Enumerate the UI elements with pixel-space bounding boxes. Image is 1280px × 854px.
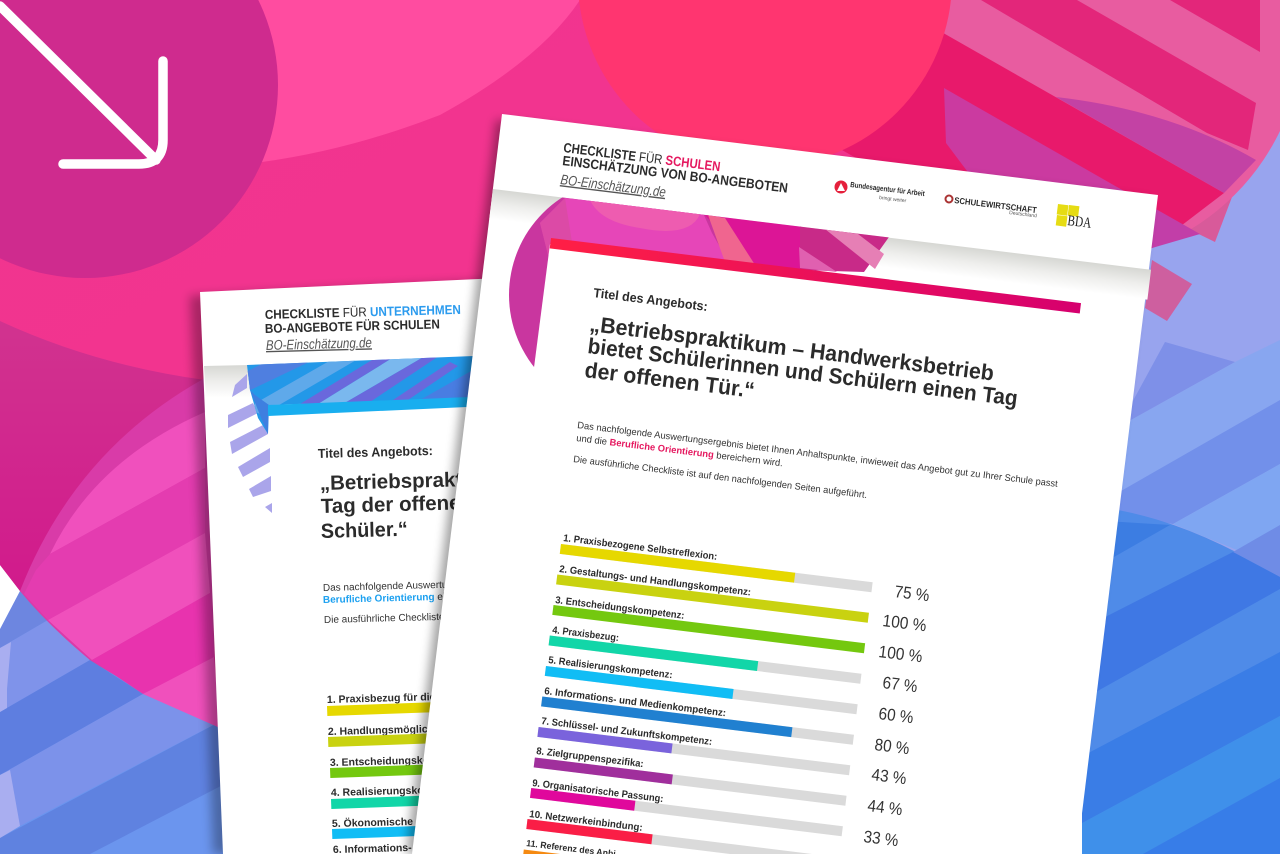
- background: striped right circle: [837, 0, 1280, 263]
- left sheet title: Titel des Angebots:: [318, 443, 433, 461]
- bar 6: [541, 686, 911, 758]
- bar 3: 3. Entscheidungskompetenz:: [555, 595, 685, 622]
- panel: main sheet, checklist for schools: [412, 114, 1158, 854]
- main sheet gradient bar: [550, 238, 1081, 313]
- bar 1: 75 %: [894, 582, 931, 605]
- bar 6: 80 %: [874, 735, 911, 758]
- background: lower-left circle layers: [0, 321, 220, 728]
- panel: left sheet, checklist for companies: [200, 278, 500, 854]
- bar 4: 67 %: [882, 673, 919, 696]
- main sheet headline: „Betriebspraktikum – Handwerksbetrieb: [588, 311, 995, 386]
- bar 4: [549, 625, 919, 696]
- bar 9: 33 %: [863, 827, 900, 850]
- left sheet cyan bar: [268, 397, 470, 416]
- left sheet intro text: Berufliche Orientierung eine: [323, 591, 457, 606]
- left sheet title: Schüler.“: [321, 518, 408, 543]
- left sheet title: „Betriebsprakt: [320, 468, 463, 495]
- logo: Schulewirtschaft: Deutschland: [1009, 210, 1037, 219]
- bar 1: [560, 533, 931, 605]
- logo: Bundesagentur für Arbeit: Bundesagentur für Arbeit: [850, 180, 926, 198]
- left sheet shadow: [190, 280, 500, 854]
- bar 1: 1. Praxisbezogene Selbstreflexion:: [563, 533, 718, 563]
- left sheet title: Tag der offene: [321, 491, 461, 518]
- left sheet intro text: [323, 579, 459, 626]
- icon: arrow pointing down-right: [0, 6, 163, 164]
- bar 10: [526, 809, 812, 854]
- left sheet bars: 5. Ökonomische Ko: [332, 814, 430, 830]
- main sheet white inner panel: [471, 244, 1082, 854]
- left sheet lavender stripes: [228, 374, 272, 513]
- bar 5: 60 %: [878, 704, 915, 727]
- bar 2: 100 %: [882, 611, 928, 635]
- bar 9: 9. Organisatorische Passung:: [532, 778, 664, 805]
- left sheet intro text: Das nachfolgende Auswertung: [323, 579, 459, 594]
- left sheet fold band: [204, 365, 250, 398]
- bar 8: 44 %: [867, 796, 904, 819]
- left sheet blue header graphic: [247, 356, 472, 434]
- bar 2: [556, 564, 928, 635]
- bar 3: [552, 595, 924, 666]
- bar 5: 5. Realisierungskompetenz:: [548, 655, 673, 681]
- logo: Schulewirtschaft: SCHULEWIRTSCHAFT: [954, 195, 1038, 215]
- background: lower pink tab: [1145, 260, 1192, 321]
- bar 8: [534, 746, 904, 819]
- bar 8: 8. Zielgruppenspezifika:: [536, 746, 644, 770]
- left sheet bars: 1. Praxisbezug für die S: [327, 691, 445, 706]
- left sheet bars: 2. Handlungsmöglichk: [328, 723, 440, 738]
- main sheet fold band: [489, 189, 1151, 300]
- left sheet header text: CHECKLISTE FÜR UNTERNEHMEN: [265, 302, 461, 322]
- logo: BDA: [1056, 204, 1092, 232]
- main sheet intro text: und die Berufliche Orientierung bereichern wird.: [576, 433, 783, 469]
- logo: BDA: BDA: [1067, 213, 1092, 232]
- bar 2: 2. Gestaltungs- und Handlungskompetenz:: [559, 564, 752, 598]
- main sheet shadow: [406, 120, 1150, 854]
- bar chart: ratings per category: [523, 533, 931, 854]
- left sheet header text: [265, 302, 461, 353]
- main sheet header text: [560, 140, 789, 200]
- main sheet headline: der offenen Tür.“: [583, 357, 756, 403]
- background: light pink blob: [240, 0, 580, 162]
- bar 7: 43 %: [871, 765, 908, 788]
- logo: Bundesagentur für Arbeit: bringt weiter: [879, 195, 907, 204]
- main sheet intro text: Die ausführliche Checkliste ist auf den nachfolgenden Seiten aufgeführt.: [573, 454, 868, 501]
- left sheet bars: 3. Entscheidungskom: [330, 754, 439, 769]
- bar 4: 4. Praxisbezug:: [552, 625, 619, 644]
- bar 6: 6. Informations- und Medienkompetenz:: [544, 686, 727, 719]
- bar 7: [537, 716, 908, 788]
- main sheet header text: CHECKLISTE FÜR SCHULEN: [563, 140, 721, 174]
- bar 9: [530, 778, 900, 850]
- main sheet headline: bietet Schülerinnen und Schülern einen Tag: [586, 333, 1019, 411]
- left sheet bars: 4. Realisierungskom: [331, 784, 433, 799]
- main sheet circular graphic: [509, 198, 889, 367]
- left sheet bars: [327, 691, 452, 854]
- background: red-pink circle: [578, 0, 952, 167]
- main sheet intro text: Das nachfolgende Auswertungsergebnis bietet Ihnen Anhaltspunkte, inwieweit das Angebot gut zu Ihrer Schule passt: [577, 420, 1059, 490]
- left sheet title: [318, 443, 463, 543]
- background: pink tab behind right circle: [1170, 175, 1232, 242]
- bar 3: 100 %: [878, 642, 924, 666]
- background: dark magenta circle: [0, 0, 278, 278]
- bar 7: 7. Schlüssel- und Zukunftskompetenz:: [541, 716, 713, 748]
- background: right blue bands: [1000, 130, 1280, 854]
- left sheet header text: BO-ANGEBOTE FÜR SCHULEN: [265, 316, 440, 336]
- left sheet intro text: Die ausführliche Checkliste ist: [324, 612, 458, 626]
- bar 10: 10. Netzwerkeinbindung:: [529, 809, 643, 834]
- background: left blue bands: [0, 590, 240, 854]
- bar 5: [545, 655, 915, 727]
- main sheet header text: BO-Einschätzung.de: [560, 171, 667, 200]
- main sheet header text: EINSCHÄTZUNG VON BO-ANGEBOTEN: [562, 153, 789, 196]
- logo: Bundesagentur für Arbeit: [834, 180, 926, 204]
- left sheet header text: BO-Einschätzung.de: [266, 334, 372, 353]
- background: white wedge: [0, 565, 20, 629]
- main sheet title label: Titel des Angebots:: [593, 285, 709, 314]
